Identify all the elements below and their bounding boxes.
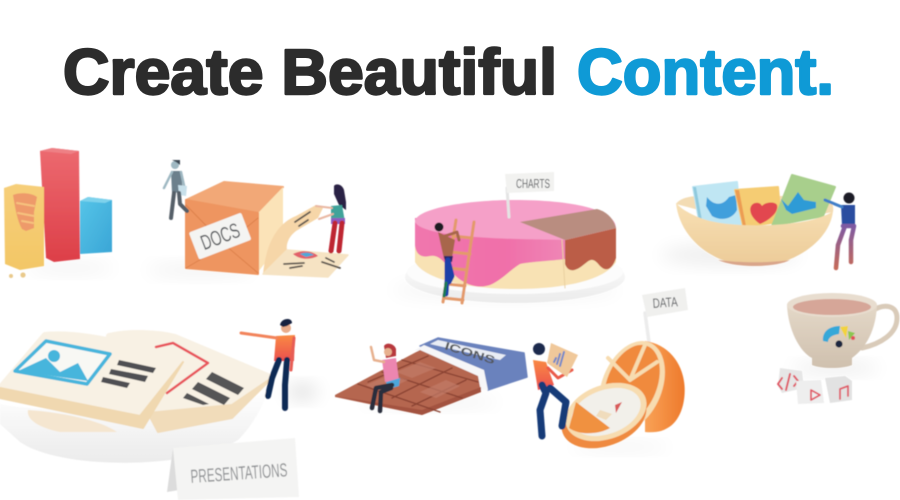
title: dark words: Create Beautiful	[63, 36, 557, 108]
shadow	[570, 442, 670, 452]
shadow	[145, 263, 255, 277]
foil strip	[415, 345, 488, 390]
wrapper: ICONS	[443, 340, 496, 367]
panel: cookies on plate	[0, 319, 318, 500]
card: presentations: PRESENTATIONS	[190, 460, 288, 488]
plate	[405, 250, 625, 303]
shadow	[25, 262, 115, 274]
ladder	[443, 220, 474, 303]
shadow	[790, 362, 880, 374]
card: twitter	[693, 182, 741, 226]
panel: social bowl	[660, 175, 855, 268]
panel: docs box	[145, 160, 348, 277]
person: presenter	[241, 319, 318, 408]
bar: red	[40, 148, 80, 262]
card: heart	[735, 187, 781, 226]
card: thumb	[772, 175, 835, 226]
person: climber	[434, 222, 459, 296]
handle	[862, 306, 897, 348]
flag: data	[642, 288, 688, 342]
orange half	[587, 331, 685, 441]
cards	[693, 175, 835, 226]
chocolate icing side	[565, 228, 616, 270]
chocolate slice top	[520, 209, 616, 240]
icon: picture	[15, 341, 110, 384]
person: woman with paper	[316, 184, 346, 251]
die: play	[796, 380, 824, 404]
orange slice	[553, 372, 655, 459]
flag: data: DATA	[652, 294, 678, 311]
panel: pie cake	[390, 172, 625, 303]
die: code	[778, 368, 804, 393]
bar: yellow	[4, 184, 44, 270]
shadow	[390, 280, 620, 300]
person: woman at bowl	[825, 192, 855, 268]
crumbs	[9, 272, 26, 278]
shadow	[660, 245, 800, 265]
back cookie	[28, 410, 117, 432]
logo	[823, 326, 855, 348]
text lines	[101, 360, 156, 388]
dice	[778, 368, 852, 404]
bowl back	[676, 196, 833, 226]
box	[186, 182, 283, 274]
person: walking grey figure	[164, 160, 187, 218]
card: presentations	[167, 438, 299, 500]
curling paper	[263, 205, 348, 277]
wrapper	[420, 338, 527, 390]
panel: orange with person	[533, 288, 688, 459]
bar: blue	[80, 197, 112, 254]
right cookie	[109, 333, 273, 432]
flag: charts: CHARTS	[516, 176, 550, 191]
chart paper	[547, 343, 578, 377]
flag: charts	[505, 172, 554, 217]
cup body	[787, 305, 877, 368]
cake top	[415, 200, 616, 240]
label: docs: DOCS	[198, 219, 243, 255]
plate	[0, 390, 268, 463]
panel: bar chart blocks	[4, 148, 115, 278]
person: seated woman	[371, 344, 400, 411]
pink icing side	[415, 218, 565, 287]
cake base	[415, 225, 616, 289]
panel: chocolate bar	[335, 338, 527, 415]
title	[63, 36, 834, 108]
die: music	[825, 376, 852, 403]
person: man with chart	[533, 343, 578, 436]
chocolate	[335, 350, 481, 415]
label: docs	[189, 213, 251, 260]
left cookie	[0, 334, 183, 428]
shadow	[360, 396, 500, 408]
panel: coffee cup	[778, 293, 897, 404]
title: blue word: Content.	[577, 36, 834, 108]
rim and coffee	[787, 293, 877, 317]
bowl	[676, 203, 833, 266]
